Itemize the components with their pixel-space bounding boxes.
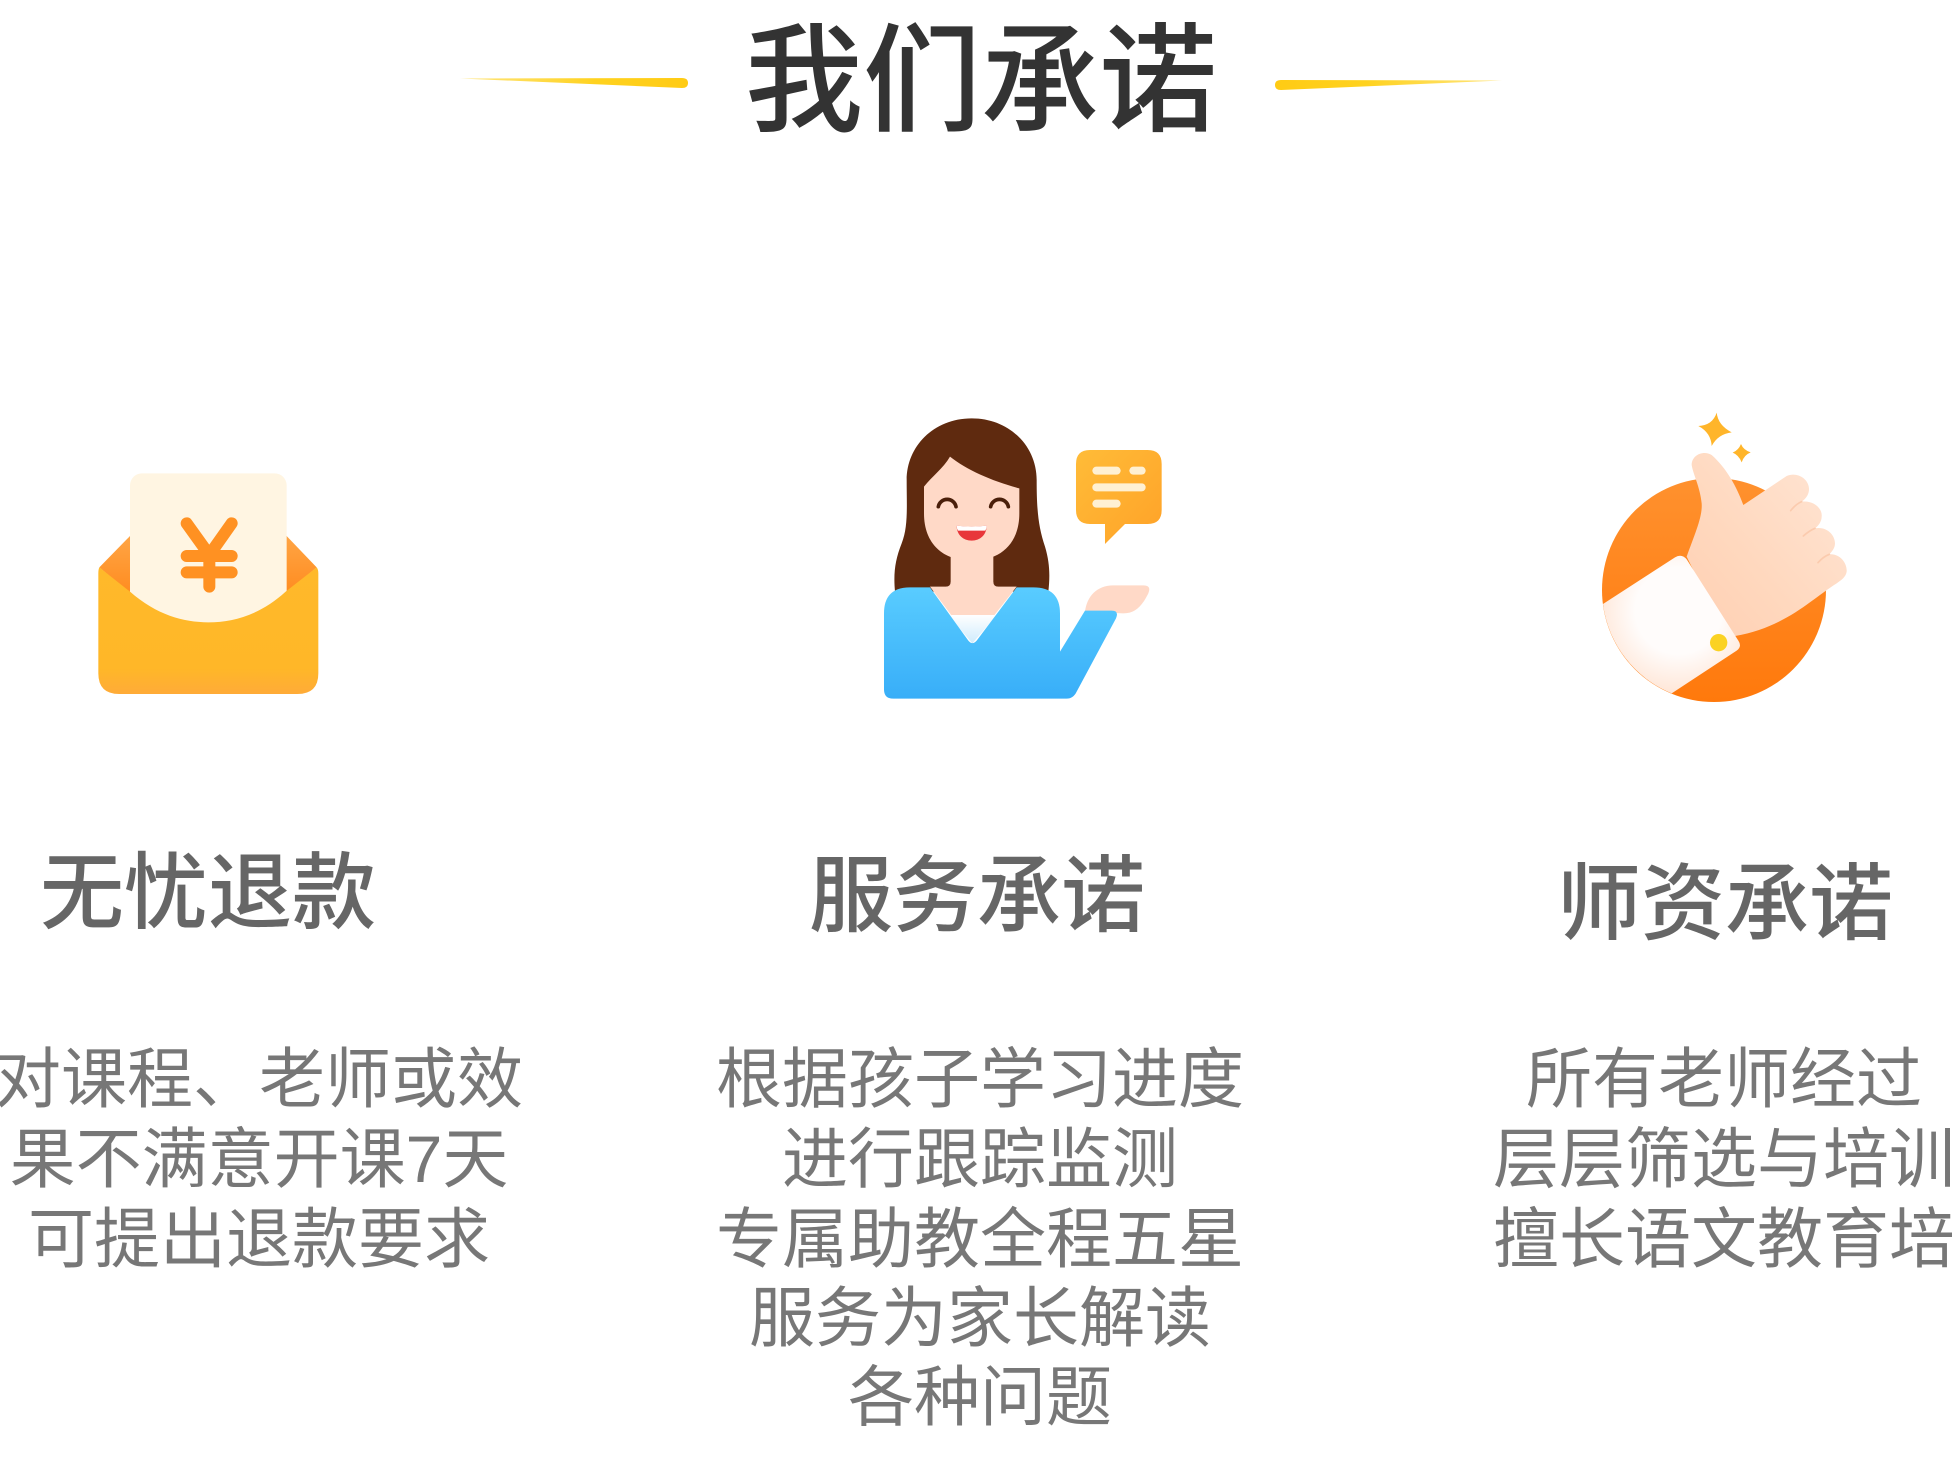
text: service description: 各种问题 — [848, 1360, 1112, 1434]
icon: thumbs up on orange disc — [1602, 413, 1847, 702]
text: refund description: 果不满意开课7天 — [10, 1122, 508, 1196]
text: teachers description — [1493, 1042, 1952, 1276]
panel: teachers — [1493, 413, 1952, 1276]
text: teachers description: 所有老师经过 — [1526, 1042, 1922, 1116]
title text: 我们承诺 — [745, 16, 1217, 148]
text: refund description — [0, 1042, 523, 1276]
text: service description — [716, 1042, 1244, 1434]
text: teachers description: 层层筛选与培训 — [1493, 1122, 1952, 1196]
panel: service — [716, 418, 1244, 1434]
heading: refund: 无忧退款 — [40, 846, 376, 940]
left title accent — [460, 78, 688, 88]
text: refund description: 可提出退款要求 — [28, 1202, 490, 1276]
icon: envelope with yen note — [98, 473, 318, 694]
panel: refund — [0, 473, 523, 1276]
icon: smiling teacher with speech bubble — [884, 418, 1162, 699]
text: service description: 进行跟踪监测 — [782, 1122, 1178, 1196]
heading: service: 服务承诺 — [809, 849, 1145, 943]
text: teachers description: 擅长语文教育培 — [1493, 1202, 1952, 1276]
right title accent — [1275, 80, 1502, 90]
text: service description: 服务为家长解读 — [749, 1281, 1211, 1355]
text: service description: 根据孩子学习进度 — [716, 1042, 1244, 1116]
heading: teachers: 师资承诺 — [1557, 857, 1893, 951]
title — [460, 16, 1502, 148]
text: service description: 专属助教全程五星 — [716, 1202, 1244, 1276]
text: refund description: 对课程、老师或效 — [0, 1042, 523, 1116]
